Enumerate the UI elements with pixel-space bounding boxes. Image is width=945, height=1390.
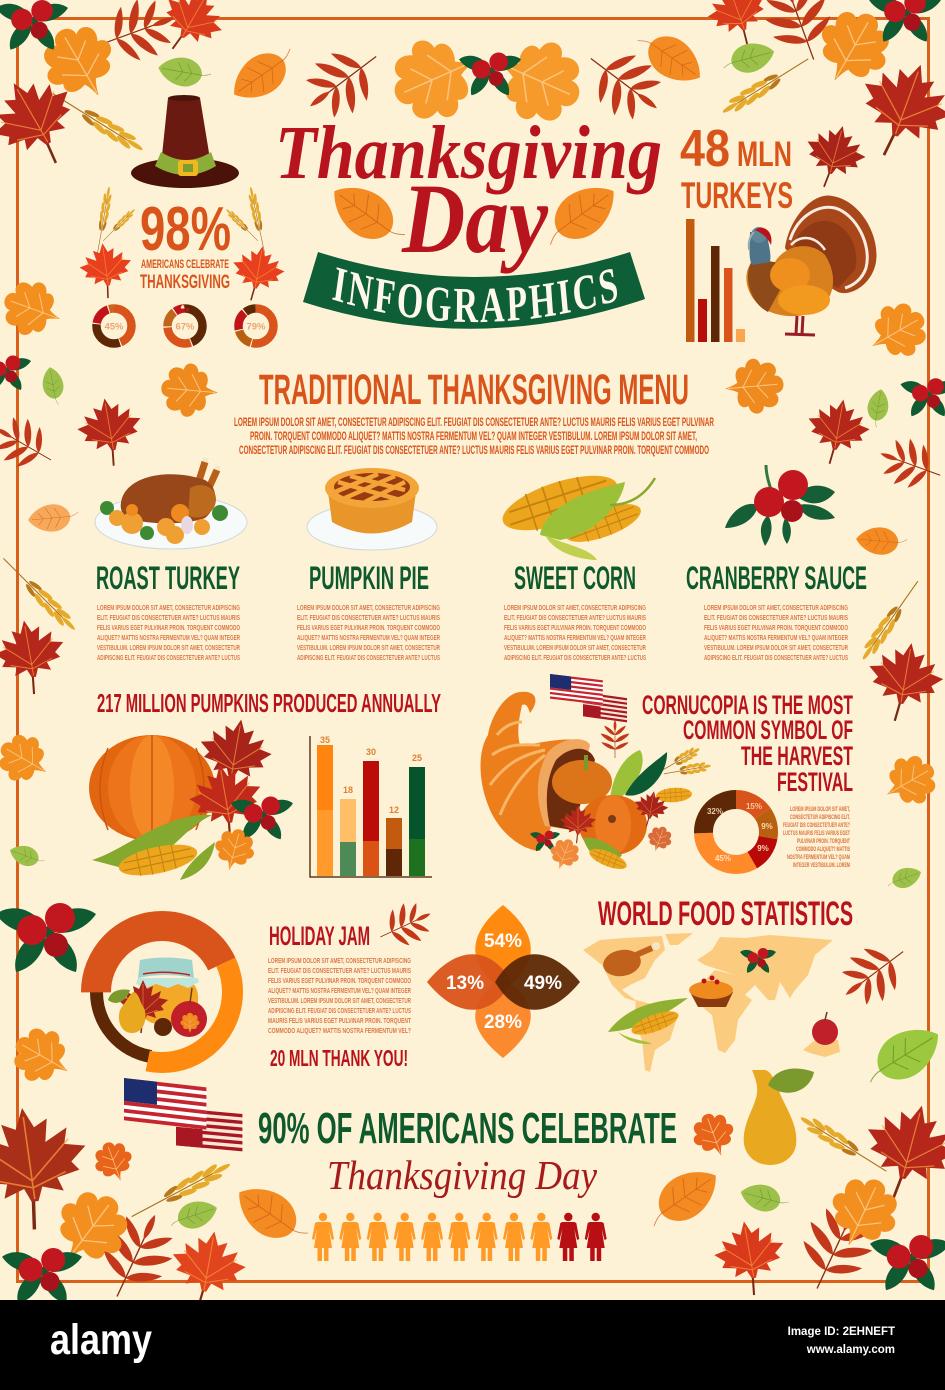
bar chart: pumpkins: 12	[389, 805, 399, 815]
text block: roast turkey: LOREM IPSUM DOLOR SIT AMET, CONSECTETUR ADIPISCING	[97, 605, 240, 612]
donut: 67 percent	[168, 308, 202, 344]
bar chart: pumpkins	[310, 735, 432, 877]
icon: side berries left	[0, 903, 96, 972]
donut chart: cornucopia: 45%	[715, 854, 731, 863]
text block: menu intro	[234, 417, 714, 457]
text block: sweet corn: LOREM IPSUM DOLOR SIT AMET, CONSECTETUR ADIPISCING	[504, 605, 646, 612]
icon: large american flags	[124, 1078, 242, 1151]
icon: roast turkey on plate	[95, 458, 247, 549]
text block: cranberry sauce: ELIT. FEUGIAT DIS CONSECTETUER ANTE? LUCTUS MAURIS	[704, 615, 848, 622]
text block: holiday jam: LOREM IPSUM DOLOR SIT AMET, CONSECTETUR ADIPISCING	[268, 958, 411, 965]
decoration: leaves beside menu heading	[73, 356, 874, 471]
text block: pumpkin pie: ELIT. FEUGIAT DIS CONSECTETUER ANTE? LUCTUS MAURIS	[297, 615, 440, 622]
illustration: pumpkin with leaves and corn	[89, 713, 293, 881]
heading: pumpkin pie: PUMPKIN PIE	[309, 560, 429, 596]
stat: 98 percent	[140, 195, 231, 293]
decoration: large green leaf	[856, 1015, 945, 1097]
text block: roast turkey: ADIPISCING ELIT. FEUGIAT DIS CONSECTETUER ANTE? LUCTUS	[97, 655, 240, 662]
heading: 217 million pumpkins: 217 MILLION PUMPKINS PRODUCED ANNUALLY	[97, 688, 441, 718]
title: Thanksgiving Day: Thanksgiving	[275, 111, 662, 195]
icon: pie on map	[689, 976, 733, 1007]
wheat and maple wreath	[77, 186, 288, 305]
icon: small fern	[372, 895, 439, 956]
stat: 48 mln turkeys	[680, 120, 793, 216]
text block: holiday jam: VESTIBULUM. LOREM IPSUM DOLOR SIT AMET, CONSECTETUR	[268, 998, 411, 1005]
icon: turkey	[746, 196, 877, 335]
icon: cranberries	[725, 465, 835, 546]
text block: holiday jam	[268, 958, 412, 1035]
text block: cranberry sauce: ADIPISCING ELIT. FEUGIAT DIS CONSECTETUER ANTE? LUCTUS	[704, 655, 848, 662]
decoration: side leaves upper	[0, 273, 945, 894]
text block: roast turkey: VESTIBULUM. LOREM IPSUM DOLOR SIT AMET, CONSECTETUR	[97, 645, 240, 652]
heading: holiday jam: HOLIDAY JAM	[269, 921, 370, 951]
decoration: leaves beside Day	[321, 173, 627, 258]
icon: apple on map	[812, 1012, 838, 1045]
text block: cranberry sauce: LOREM IPSUM DOLOR SIT AMET, CONSECTETUR ADIPISCING	[704, 605, 848, 612]
stat: 20 mln thank you: 20 MLN THANK YOU!	[270, 1045, 408, 1071]
text block: cornucopia	[783, 806, 850, 869]
text block: roast turkey: ALIQUET? MATTIS NOSTRA FERMENTUM VEL? QUAM INTEGER	[97, 635, 240, 642]
world map	[583, 933, 840, 1072]
heading: sweet corn: SWEET CORN	[514, 560, 636, 596]
text block: pumpkin pie	[297, 605, 440, 662]
text block: sweet corn: VESTIBULUM. LOREM IPSUM DOLOR SIT AMET, CONSECTETUR	[504, 645, 646, 652]
heading: cornucopia: FESTIVAL	[777, 767, 853, 797]
donut chart: cornucopia	[704, 800, 773, 864]
text block: cornucopia: INTEGER VESTIBULUM. LOREM	[793, 862, 850, 869]
bar chart: pumpkins: 25	[412, 753, 422, 763]
text block: sweet corn: FELIS VARIUS EGET PULVINAR PROIN. TORQUENT COMMODO	[504, 625, 646, 632]
donut: 45 percent	[96, 308, 132, 344]
donut chart: cornucopia: 32%	[707, 807, 723, 816]
icon: orange flower left	[89, 1136, 138, 1187]
icon: jam jar with fruit	[108, 958, 207, 1037]
donut chart: cornucopia: 9%	[757, 844, 769, 853]
decoration: top right leaves	[630, 0, 945, 172]
stat: 98 percent: 98%	[140, 195, 231, 264]
donut chart: cornucopia: 9%	[761, 822, 773, 831]
bar chart: pumpkins: 18	[343, 785, 353, 795]
text block: cornucopia: PULVINAR PROIN. TORQUENT	[797, 838, 850, 845]
footer bar	[0, 1300, 945, 1390]
stat: 98 percent: THANKSGIVING	[140, 272, 230, 293]
footer image id: Image ID: 2EHNEFT	[788, 1326, 895, 1338]
petal chart: 49%	[524, 973, 562, 994]
subtitle: thanksgiving day script: Thanksgiving Day	[327, 1152, 598, 1198]
text block: holiday jam: MAURIS FELIS VARIUS EGET PULVINAR PROIN. TORQUENT	[268, 1018, 412, 1025]
donut: 45 percent: 45%	[104, 322, 124, 332]
footer image id: www.alamy.com	[806, 1344, 895, 1356]
petal chart	[427, 905, 580, 1058]
heading: cornucopia	[642, 690, 853, 797]
donut: 79 percent: 79%	[246, 322, 266, 332]
decoration: dark maple by turkeys	[797, 118, 872, 195]
decoration: red fern right	[829, 930, 920, 1017]
text block: pumpkin pie: VESTIBULUM. LOREM IPSUM DOLOR SIT AMET, CONSECTETUR	[297, 645, 440, 652]
decoration: title top leaves and berries	[291, 23, 676, 135]
stat: 48 mln turkeys: MLN	[737, 135, 792, 174]
people pictogram	[312, 1213, 607, 1261]
donut: 67 percent: 67%	[175, 322, 195, 332]
banner: infographics: INFOGRAPHICS	[332, 267, 617, 322]
decoration: top left leaves	[0, 0, 304, 182]
text block: cranberry sauce: VESTIBULUM. LOREM IPSUM DOLOR SIT AMET, CONSECTETUR	[704, 645, 848, 652]
icon: small american flags	[550, 674, 627, 722]
text block: sweet corn	[504, 605, 646, 662]
text block: holiday jam: COMMODO ALIQUET? MATTIS NOSTRA FERMENTUM VEL?	[268, 1028, 411, 1035]
icon: pumpkin pie on plate	[307, 468, 437, 550]
text block: pumpkin pie: ALIQUET? MATTIS NOSTRA FERMENTUM VEL? QUAM INTEGER	[297, 635, 440, 642]
text block: roast turkey: FELIS VARIUS EGET PULVINAR PROIN. TORQUENT COMMODO	[97, 625, 240, 632]
icon: orange flower right	[687, 1107, 741, 1163]
text block: holiday jam: ADIPISCING ELIT. FEUGIAT DIS CONSECTETUER ANTE? LUCTUS	[268, 1008, 411, 1015]
stat: 48 mln turkeys: 48	[680, 120, 730, 178]
bar chart: pumpkins: 30	[366, 747, 376, 757]
text block: holiday jam: FELIS VARIUS EGET PULVINAR PROIN. TORQUENT COMMODO	[268, 978, 411, 985]
heading: roast turkey: ROAST TURKEY	[96, 560, 240, 596]
text block: cranberry sauce	[704, 605, 848, 662]
footer logo: alamy	[50, 1316, 152, 1364]
bar chart: pumpkins: 35	[320, 735, 330, 745]
text block: sweet corn: ALIQUET? MATTIS NOSTRA FERMENTUM VEL? QUAM INTEGER	[504, 635, 646, 642]
decoration: bottom right leaves	[638, 1094, 945, 1303]
text block: cranberry sauce: ALIQUET? MATTIS NOSTRA FERMENTUM VEL? QUAM INTEGER	[704, 635, 848, 642]
ring chart: holiday jam	[92, 922, 232, 1062]
icon: corn on map	[608, 998, 688, 1044]
stat: 48 mln turkeys: TURKEYS	[681, 175, 793, 216]
text block: holiday jam: ELIT. FEUGIAT DIS CONSECTETUER ANTE? LUCTUS MAURIS	[268, 968, 411, 975]
decoration: bottom left leaves	[0, 1018, 317, 1315]
illustration: cornucopia	[480, 692, 712, 874]
donut: 79 percent	[238, 308, 274, 344]
petal chart: 13%	[446, 973, 484, 994]
text block: cornucopia: CONSECTETUR ADIPISCING ELIT.	[790, 814, 850, 821]
text block: sweet corn: ELIT. FEUGIAT DIS CONSECTETUER ANTE? LUCTUS MAURIS	[504, 615, 646, 622]
text block: pumpkin pie: LOREM IPSUM DOLOR SIT AMET, CONSECTETUR ADIPISCING	[297, 605, 440, 612]
icon: berries on map	[740, 948, 776, 973]
text block: holiday jam: ALIQUET? MATTIS NOSTRA FERMENTUM VEL? QUAM INTEGER	[268, 988, 411, 995]
text block: pumpkin pie: ADIPISCING ELIT. FEUGIAT DIS CONSECTETUER ANTE? LUCTUS	[297, 655, 440, 662]
text block: sweet corn: ADIPISCING ELIT. FEUGIAT DIS CONSECTETUER ANTE? LUCTUS	[504, 655, 646, 662]
text block: cranberry sauce: FELIS VARIUS EGET PULVINAR PROIN. TORQUENT COMMODO	[704, 625, 848, 632]
text block: cornucopia: LOREM IPSUM DOLOR SIT AMET,	[790, 806, 850, 813]
bar chart: turkeys	[686, 219, 745, 342]
text block: roast turkey	[97, 605, 240, 662]
icon: pilgrim hat	[131, 95, 239, 188]
stat: 98 percent: AMERICANS CELEBRATE	[141, 257, 229, 271]
text block: cornucopia: FEUGIAT DIS CONSECTETUER ANTE?	[783, 822, 850, 829]
footer image id	[788, 1326, 895, 1356]
title: Thanksgiving Day	[275, 111, 662, 274]
text block: cornucopia: NOSTRA FERMENTUM VEL? QUAM	[787, 854, 850, 861]
icon: pear	[744, 1068, 814, 1165]
text block: pumpkin pie: FELIS VARIUS EGET PULVINAR PROIN. TORQUENT COMMODO	[297, 625, 440, 632]
title: Thanksgiving Day: Day	[401, 163, 549, 274]
icon: chicken leg on map	[601, 942, 660, 979]
heading: cornucopia: THE HARVEST	[741, 741, 853, 771]
icon: sweet corn	[496, 464, 655, 560]
petal chart: 54%	[484, 931, 522, 952]
donut chart: cornucopia: 15%	[746, 802, 762, 811]
text block: roast turkey: ELIT. FEUGIAT DIS CONSECTETUER ANTE? LUCTUS MAURIS	[97, 615, 240, 622]
text block: cornucopia: LUCTUS MAURIS FELIS VARIUS EGET	[783, 830, 850, 837]
petal chart: 28%	[484, 1012, 522, 1033]
text block: cornucopia: COMMODO ALIQUET? MATTIS	[796, 846, 850, 853]
